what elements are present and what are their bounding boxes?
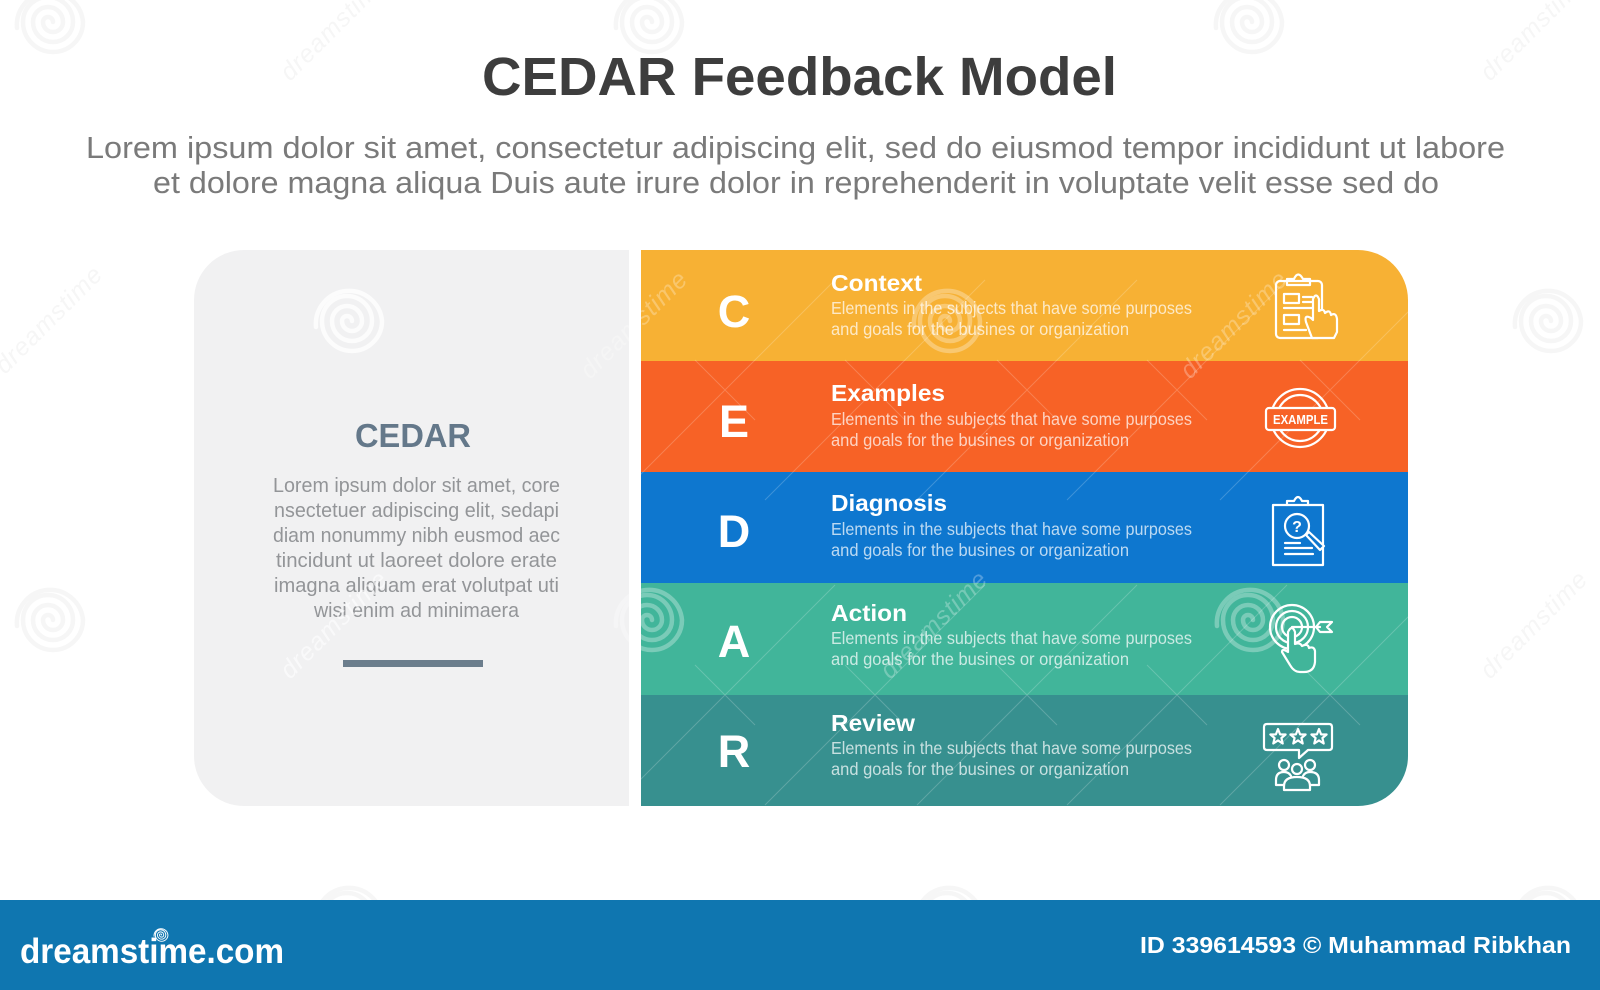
row: Action (718, 600, 1332, 672)
row: Diagnosis (718, 490, 1324, 565)
icon: clipboard with hand (1276, 274, 1337, 338)
text: dreamstime (274, 565, 394, 684)
Review description: Elements in the subjects that have some purposes (831, 738, 1192, 758)
Examples heading: Examples (831, 380, 945, 406)
band: Action background (641, 583, 1408, 695)
Diagnosis heading: Diagnosis (831, 490, 947, 516)
Review description (831, 738, 1192, 779)
Examples description: and goals for the busines or organization (831, 430, 1129, 450)
icon: example stamp (1266, 389, 1335, 447)
panel paragraph: wisi enim ad minimaera (313, 599, 520, 622)
Context description: Elements in the subjects that have some purposes (831, 298, 1192, 318)
title: CEDAR Feedback Model (482, 47, 1117, 107)
text: dreamstime (1174, 265, 1294, 384)
footer logo: dreamstime.com (20, 932, 284, 971)
panel: CEDAR summary (194, 250, 629, 806)
text: dreamstime (874, 565, 994, 684)
band: Review background (641, 695, 1408, 806)
Diagnosis description: and goals for the busines or organization (831, 540, 1129, 560)
panel paragraph (273, 474, 560, 622)
panel paragraph: nsectetuer adipiscing elit, sedapi (274, 499, 559, 522)
icon: clipboard with magnifier: ? (1292, 519, 1302, 536)
panel paragraph: diam nonummy nibh eusmod aec (273, 524, 560, 547)
Diagnosis description: Elements in the subjects that have some purposes (831, 519, 1192, 539)
subtitle: et dolore magna aliqua Duis aute irure dolor in reprehenderit in voluptate velit esse sed do (153, 165, 1439, 200)
text: dreamstime (1474, 565, 1594, 684)
icon: star rating speech bubble and people (1264, 724, 1332, 790)
icon: target with hand (1270, 605, 1332, 672)
row: Review (718, 710, 1332, 790)
band: Diagnosis background (641, 472, 1408, 583)
Action description (831, 628, 1192, 669)
band: Context background (641, 250, 1408, 361)
Context description (831, 298, 1192, 339)
Action heading: Action (831, 600, 907, 626)
panel heading: CEDAR (355, 417, 471, 454)
Context description: and goals for the busines or organization (831, 319, 1129, 339)
band: Examples background (641, 361, 1408, 472)
panel paragraph: Lorem ipsum dolor sit amet, core (273, 474, 560, 497)
letter C: C (718, 286, 750, 337)
Review heading: Review (831, 710, 915, 736)
Examples description: Elements in the subjects that have some purposes (831, 409, 1192, 429)
icon: example stamp: EXAMPLE (1273, 413, 1328, 427)
panel paragraph: tincidunt ut laoreet dolore erate (276, 549, 557, 572)
letter A: A (718, 616, 750, 667)
Review description: and goals for the busines or organization (831, 759, 1129, 779)
footer credit: ID 339614593 © Muhammad Ribkhan (1140, 932, 1571, 958)
row: Context (718, 270, 1337, 339)
Action description: Elements in the subjects that have some purposes (831, 628, 1192, 648)
panel paragraph: imagna aliquam erat volutpat uti (274, 574, 559, 597)
Diagnosis description (831, 519, 1192, 560)
panel rule (343, 660, 483, 667)
Examples description (831, 409, 1192, 450)
subtitle: Lorem ipsum dolor sit amet, consectetur adipiscing elit, sed do eiusmod tempor incididunt ut labore (86, 130, 1505, 165)
footer bar (0, 900, 1600, 990)
letter E: E (719, 396, 749, 447)
text: dreamstime (574, 265, 694, 384)
icon: clipboard with magnifier (1273, 497, 1324, 565)
letter D: D (718, 506, 750, 557)
letter R: R (718, 726, 750, 777)
Context heading: Context (831, 270, 922, 296)
row: Examples (719, 380, 1335, 450)
subtitle (86, 130, 1505, 200)
Action description: and goals for the busines or organization (831, 649, 1129, 669)
